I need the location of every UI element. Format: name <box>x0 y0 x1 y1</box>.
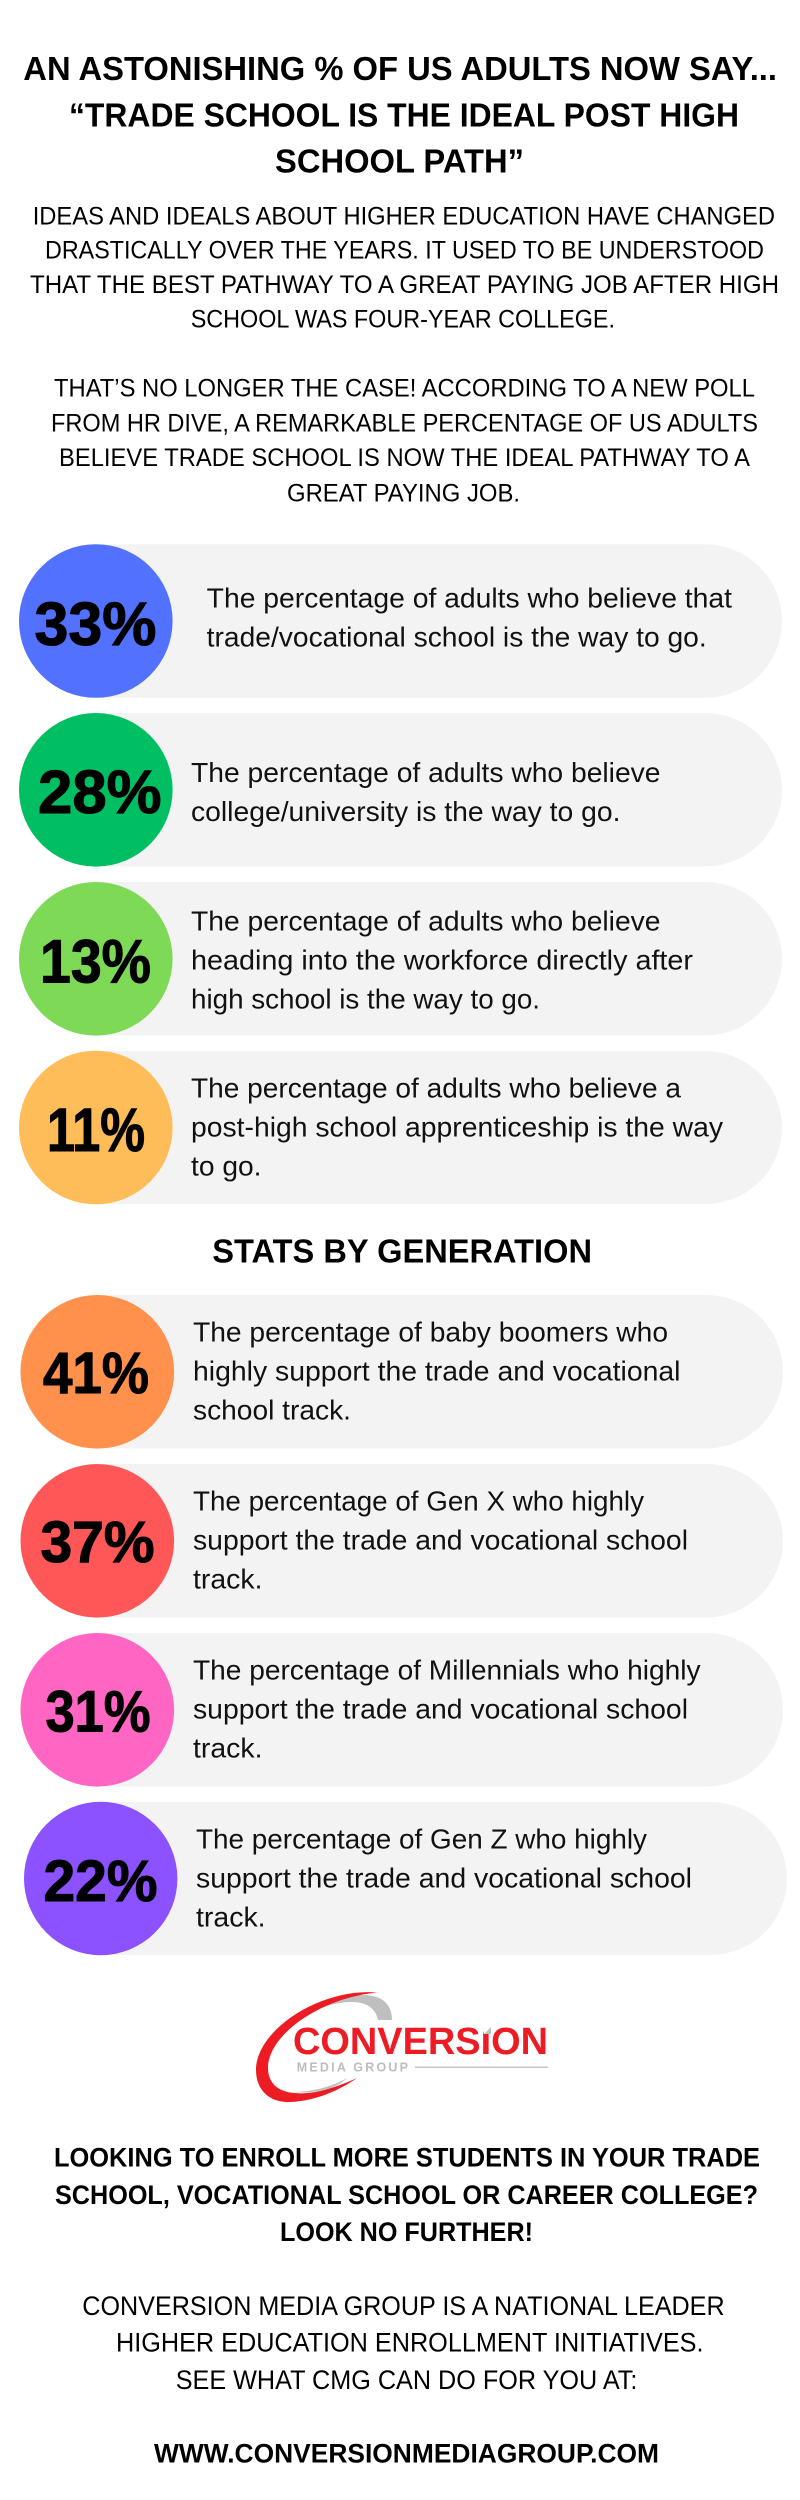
panel: 41% baby boomers: highly support the trade and vocational <box>193 1356 680 1387</box>
panel: 11% apprenticeship: to go. <box>191 1150 262 1181</box>
panel: 11% apprenticeship: post-high school apprenticeship is the way <box>191 1112 723 1142</box>
panel: 33% trade school: trade/vocational school is the way to go. <box>207 622 707 653</box>
call to action heading: SCHOOL, VOCATIONAL SCHOOL OR CAREER COLLEGE? <box>55 2180 758 2210</box>
panel: 28% college: college/university is the way to go. <box>191 796 620 827</box>
title: AN ASTONISHING % OF US ADULTS NOW SAY... <box>23 50 777 87</box>
panel: 41% baby boomers <box>20 1295 783 1449</box>
panel: 11% apprenticeship: The percentage of adults who believe a <box>191 1072 681 1103</box>
logo: Conversion Media Group: CONVERSION <box>293 2021 548 2063</box>
company description: CONVERSION MEDIA GROUP IS A NATIONAL LEADER <box>82 2291 725 2321</box>
intro text block: THAT THE BEST PATHWAY TO A GREAT PAYING JOB AFTER HIGH <box>30 271 779 299</box>
panel: 31% Millennials: 31% <box>46 1680 150 1744</box>
title: SCHOOL PATH” <box>275 143 524 180</box>
panel: 33% trade school: 33% <box>34 590 156 658</box>
title <box>23 50 777 180</box>
panel: 37% Gen X: track. <box>193 1564 262 1595</box>
panel: 22% Gen Z: track. <box>196 1902 266 1933</box>
panel: 41% baby boomers: 41% <box>43 1341 149 1406</box>
panel: 28% college <box>19 713 782 867</box>
call to action heading <box>54 2143 760 2247</box>
panel: 22% Gen Z <box>24 1802 787 1955</box>
title: “TRADE SCHOOL IS THE IDEAL POST HIGH <box>69 96 739 133</box>
company description <box>82 2291 725 2395</box>
intro text block: IDEAS AND IDEALS ABOUT HIGHER EDUCATION HAVE CHANGED <box>33 202 775 230</box>
logo: Conversion Media Group: MEDIA GROUP <box>297 2061 408 2075</box>
intro text block: SCHOOL WAS FOUR-YEAR COLLEGE. <box>191 306 615 334</box>
intro text block: GREAT PAYING JOB. <box>287 479 520 507</box>
panel: 37% Gen X: 37% <box>40 1510 154 1575</box>
panel: 37% Gen X <box>20 1464 783 1618</box>
panel: 28% college: 28% <box>38 758 162 826</box>
panel: 41% baby boomers: The percentage of baby boomers who <box>193 1317 668 1348</box>
company description: HIGHER EDUCATION ENROLLMENT INITIATIVES. <box>116 2328 704 2358</box>
panel: 22% Gen Z: The percentage of Gen Z who highly <box>196 1823 647 1854</box>
intro text block <box>30 202 779 507</box>
panel: 11% apprenticeship: 11% <box>47 1096 145 1164</box>
panel: 13% workforce <box>19 882 782 1036</box>
panel: 31% Millennials <box>20 1633 783 1787</box>
panel: 31% Millennials: support the trade and vocational school <box>193 1694 688 1725</box>
panel: 37% Gen X: support the trade and vocational school <box>193 1525 688 1556</box>
call to action heading: LOOKING TO ENROLL MORE STUDENTS IN YOUR TRADE <box>54 2143 760 2173</box>
panel: 28% college: The percentage of adults who believe <box>191 757 660 788</box>
company description: SEE WHAT CMG CAN DO FOR YOU AT: <box>176 2365 637 2395</box>
panel: 13% workforce: heading into the workforce directly after <box>191 945 693 976</box>
heading: stats by generation: STATS BY GENERATION <box>212 1233 592 1270</box>
panel: 37% Gen X: The percentage of Gen X who highly <box>193 1486 644 1517</box>
intro text block: FROM HR DIVE, A REMARKABLE PERCENTAGE OF US ADULTS <box>51 409 758 437</box>
panel: 41% baby boomers: school track. <box>193 1395 351 1426</box>
website url: WWW.CONVERSIONMEDIAGROUP.COM <box>154 2439 659 2469</box>
logo: Conversion Media Group <box>256 1992 548 2102</box>
panel: 13% workforce: 13% <box>40 928 151 996</box>
panel: 31% Millennials: track. <box>193 1733 262 1764</box>
intro text block: THAT’S NO LONGER THE CASE! ACCORDING TO A NEW POLL <box>54 375 755 403</box>
panel: 31% Millennials: The percentage of Millennials who highly <box>193 1655 700 1686</box>
panel: 22% Gen Z: support the trade and vocational school <box>196 1862 692 1893</box>
panel: 11% apprenticeship <box>19 1051 782 1204</box>
panel: 33% trade school: The percentage of adults who believe that <box>207 583 732 614</box>
panel: 33% trade school <box>19 544 782 698</box>
panel: 13% workforce: high school is the way to go. <box>191 984 540 1014</box>
intro text block: DRASTICALLY OVER THE YEARS. IT USED TO BE UNDERSTOOD <box>45 236 764 264</box>
panel: 22% Gen Z: 22% <box>44 1849 158 1914</box>
call to action heading: LOOK NO FURTHER! <box>280 2217 533 2247</box>
intro text block: BELIEVE TRADE SCHOOL IS NOW THE IDEAL PATHWAY TO A <box>59 444 750 472</box>
panel: 13% workforce: The percentage of adults who believe <box>191 906 660 937</box>
